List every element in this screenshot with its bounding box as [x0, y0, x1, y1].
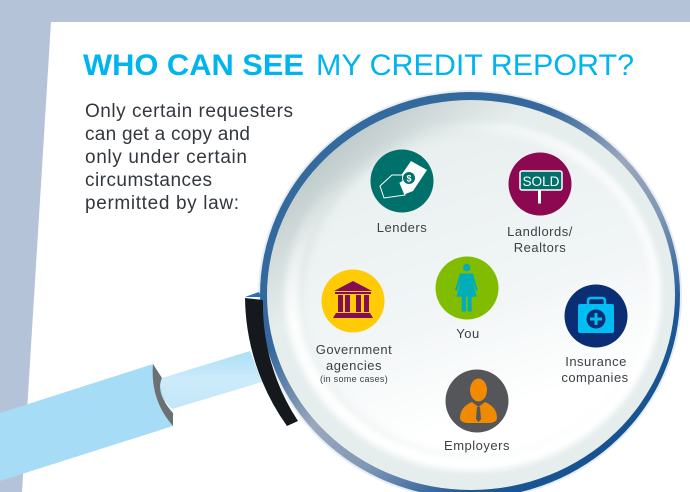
intro text: Only certain requesters: [85, 101, 293, 122]
intro text: [85, 101, 293, 214]
icon: sold sign: [508, 152, 572, 216]
label: government: Government: [316, 342, 392, 357]
icon: employer: [446, 370, 508, 432]
title: MY CREDIT REPORT?: [316, 49, 634, 82]
icon: you: [436, 256, 498, 320]
label: employers: Employers: [444, 438, 510, 453]
intro text: can get a copy and: [85, 124, 250, 145]
label: insurance: companies: [561, 370, 629, 385]
label: government: (in some cases): [320, 374, 388, 384]
intro text: only under certain: [85, 147, 247, 168]
icon: sold sign: SOLD: [522, 173, 560, 189]
intro text: permitted by law:: [85, 193, 239, 214]
intro text: circumstances: [85, 170, 212, 191]
label: lenders: Lenders: [377, 220, 427, 235]
label: landlords: [507, 224, 573, 255]
title: [83, 49, 634, 82]
magnifying glass lens: [258, 90, 682, 492]
icon: government building: [322, 270, 384, 332]
label: government: agencies: [326, 358, 382, 373]
label: landlords: Realtors: [514, 240, 566, 255]
label: insurance: [561, 354, 629, 385]
label: insurance: Insurance: [565, 354, 627, 369]
icon: lenders: [370, 150, 434, 212]
title: WHO CAN SEE: [83, 49, 304, 82]
label: government: [316, 342, 392, 384]
label: you: You: [456, 326, 480, 341]
magnifying glass handle: [0, 351, 262, 481]
label: landlords: Landlords/: [507, 224, 573, 239]
black grip: [245, 292, 298, 426]
icon: lenders: $: [406, 174, 412, 184]
icon: insurance case: [564, 284, 628, 348]
